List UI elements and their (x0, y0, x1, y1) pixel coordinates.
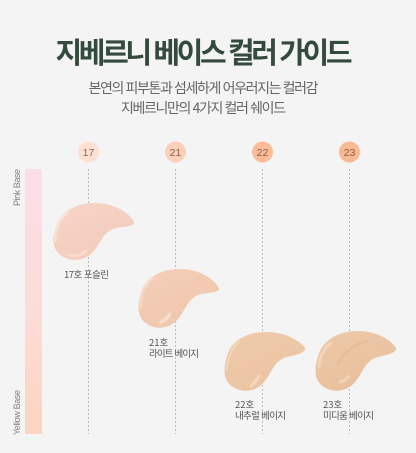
swatch label: 17: 17호 포슬린 (64, 267, 109, 281)
swatch: 23 (316, 331, 396, 391)
shade column: 23 (339, 142, 360, 434)
title: 지베르니 베이스 컬러 가이드 (56, 30, 352, 72)
axis: pink to yellow base: Yellow Base (12, 390, 22, 435)
swatch label: 21: 21호 (149, 335, 169, 349)
swatch label: 23: 미디움 베이지 (323, 408, 374, 422)
swatch: 21 (139, 269, 219, 328)
axis: pink to yellow base: Pink Base (12, 169, 22, 206)
subtitle: 본연의 피부톤과 섬세하게 어우러지는 컬러감 (88, 78, 319, 98)
subtitle (88, 78, 319, 118)
shade column: 22: 22 (257, 147, 268, 159)
swatch label: 23: 23호 (323, 397, 343, 411)
swatch label: 22: 22호 (235, 397, 255, 411)
shade column: 23: 23 (344, 147, 355, 159)
swatch: 17 (54, 203, 134, 260)
shade column: 17 (78, 142, 99, 434)
swatch: 22 (225, 332, 305, 391)
shade column: 21: 21 (170, 147, 181, 159)
axis: pink to yellow base (12, 169, 42, 435)
shade column: 17: 17 (83, 147, 94, 159)
swatch label: 23 (323, 397, 374, 422)
swatch label: 21 (149, 335, 199, 360)
swatch label: 21: 라이트 베이지 (149, 346, 199, 360)
subtitle: 지베르니만의 4가지 컬러 쉐이드 (121, 98, 286, 118)
shade column: 21 (165, 142, 186, 434)
swatch label: 22 (235, 397, 286, 422)
shade column: 22 (252, 142, 273, 434)
swatch label: 22: 내추럴 베이지 (235, 408, 286, 422)
